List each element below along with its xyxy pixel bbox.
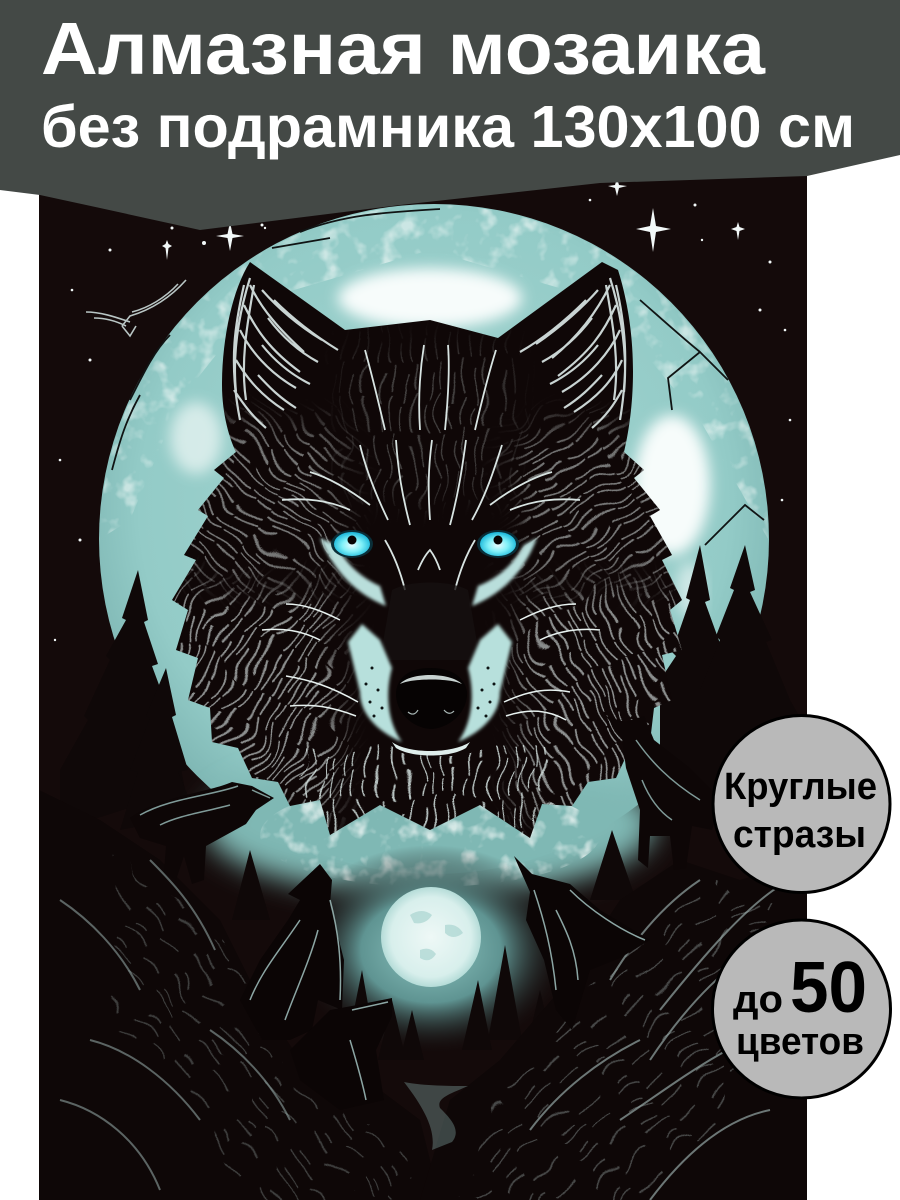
light muzzle cheeks xyxy=(348,624,512,742)
pine trees left xyxy=(114,570,186,765)
eye left xyxy=(331,530,373,558)
bird in the sky xyxy=(86,280,186,336)
small full moon xyxy=(381,887,481,987)
wolf howling right xyxy=(514,856,650,1030)
poster artwork: wolf and moon xyxy=(39,176,807,1200)
badge: up to 50 colours xyxy=(712,920,890,1098)
wolf sitting at bottom xyxy=(292,998,392,1100)
title line 2: без подрамника 130х100 см xyxy=(41,94,855,160)
moon disc xyxy=(99,204,769,874)
wolf howling left xyxy=(240,864,344,1040)
left hills and rocks xyxy=(60,854,412,1200)
stream xyxy=(404,1082,468,1150)
title xyxy=(41,7,855,160)
moon cracks xyxy=(112,209,764,545)
stars xyxy=(54,182,792,642)
muzzle bridge xyxy=(402,585,457,590)
whisker strokes xyxy=(262,604,600,720)
pine trees right xyxy=(660,545,760,763)
badge text prefix: до xyxy=(733,979,783,1021)
head silhouette xyxy=(172,262,682,838)
badge text line 2: стразы xyxy=(733,814,866,856)
badge number: 50 xyxy=(790,948,867,1028)
left rock hatching xyxy=(110,860,420,1200)
nose xyxy=(396,668,467,729)
badge: round rhinestones xyxy=(713,716,890,892)
right hills and rocks xyxy=(458,879,776,1200)
lower forest valley glow xyxy=(330,848,548,1042)
right rock hatching xyxy=(460,880,780,1200)
mouth line xyxy=(392,742,470,756)
muzzle spots xyxy=(364,666,496,718)
badge text line 1: Круглые xyxy=(724,766,877,808)
wolf left standing xyxy=(140,782,274,875)
forehead and brow strokes xyxy=(282,345,580,590)
glowing clouds below the head xyxy=(205,755,655,895)
moon mottled texture xyxy=(100,205,768,539)
giant wolf head xyxy=(172,262,682,838)
badge text line 2: цветов xyxy=(736,1021,864,1063)
fur texture xyxy=(174,326,682,834)
moon bright patches xyxy=(170,268,710,618)
title line 1: Алмазная мозаика xyxy=(41,7,766,90)
wolf right howling on ledge xyxy=(606,716,700,868)
ear left xyxy=(234,278,338,428)
ear right xyxy=(520,278,625,428)
night sky xyxy=(39,176,807,1200)
valley trees xyxy=(240,830,630,1044)
light patches under the eyes xyxy=(320,538,537,606)
eye right xyxy=(477,530,519,558)
header banner xyxy=(0,0,900,230)
